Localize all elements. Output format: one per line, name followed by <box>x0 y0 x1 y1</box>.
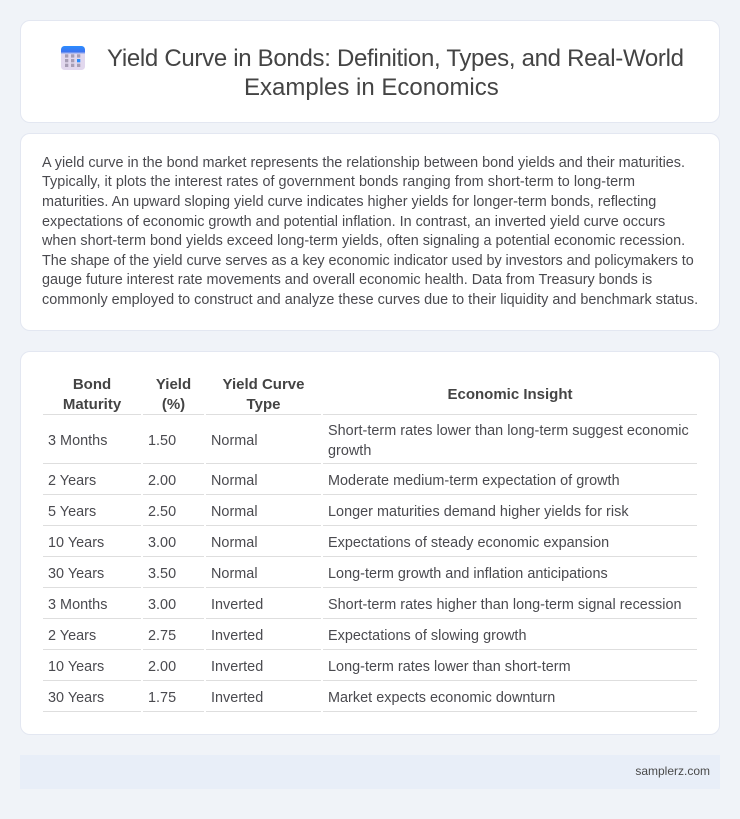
title text: Examples in Economics <box>244 74 499 101</box>
table: bond yields: Inverted <box>211 690 263 706</box>
panel: title <box>20 20 720 123</box>
table: bond yields: Short-term rates lower than long-term suggest economic <box>328 423 689 439</box>
table: bond yields: Long-term growth and inflation anticipations <box>328 566 608 582</box>
footer <box>20 755 720 789</box>
description text <box>42 155 698 308</box>
table: bond yields: 2 Years <box>48 628 96 644</box>
table: bond yields: Expectations of slowing growth <box>328 628 526 644</box>
table: bond yields: Inverted <box>211 597 263 613</box>
table: bond yields: 5 Years <box>48 504 96 520</box>
description text: Typically, it plots the interest rates of government bonds ranging from short-term to long-term <box>42 174 635 190</box>
table: bond yields: 3.00 <box>148 597 176 613</box>
table: bond yields <box>43 376 697 712</box>
table: bond yields: Normal <box>211 473 258 489</box>
icon: calendar <box>61 46 85 70</box>
table: bond yields: 10 Years <box>48 659 104 675</box>
table: bond yields: Moderate medium-term expectation of growth <box>328 473 620 489</box>
table: bond yields: Normal <box>211 535 258 551</box>
table: bond yields: 2 Years <box>48 473 96 489</box>
description text: The shape of the yield curve serves as a key economic indicator used by investors and policymakers to <box>42 253 694 269</box>
table: bond yields: 1.50 <box>148 433 176 449</box>
description text: gauge future interest rate movements and overall economic health. Data from Treasury bonds is <box>42 272 652 288</box>
table: bond yields: 10 Years <box>48 535 104 551</box>
table: bond yields: Economic Insight <box>447 386 572 403</box>
description text: when short-term bond yields exceed long-term yields, often signaling a potential economic recession. <box>42 233 685 249</box>
table: bond yields: 30 Years <box>48 566 104 582</box>
table: bond yields: Inverted <box>211 628 263 644</box>
panel: yield table <box>20 351 720 735</box>
description text: maturities. An upward sloping yield curve indicates higher yields for longer-term bonds, reflecting <box>42 194 656 210</box>
table: bond yields: Normal <box>211 433 258 449</box>
footer source text: samplerz.com <box>635 764 710 778</box>
title text: Yield Curve in Bonds: Definition, Types, and Real-World <box>107 45 684 72</box>
table: bond yields: 2.50 <box>148 504 176 520</box>
table: bond yields: 30 Years <box>48 690 104 706</box>
table: bond yields: Normal <box>211 566 258 582</box>
table: bond yields: Longer maturities demand higher yields for risk <box>328 504 629 520</box>
panel: description <box>20 133 720 331</box>
title text <box>107 45 684 101</box>
table: bond yields: Type <box>247 396 280 412</box>
table: bond yields: Maturity <box>63 396 121 412</box>
table: bond yields: Expectations of steady economic expansion <box>328 535 609 551</box>
table: bond yields: 2.75 <box>148 628 176 644</box>
description text: commonly employed to construct and analyze these curves due to their liquidity and benchmark status. <box>42 292 698 308</box>
table: bond yields: growth <box>328 442 371 458</box>
table: bond yields: 3 Months <box>48 433 107 449</box>
table: bond yields: 2.00 <box>148 473 176 489</box>
table: bond yields: Normal <box>211 504 258 520</box>
table: bond yields: Market expects economic downturn <box>328 690 555 706</box>
table: bond yields: 3.50 <box>148 566 176 582</box>
table: bond yields: Yield Curve <box>222 376 304 393</box>
table: bond yields: 3 Months <box>48 597 107 613</box>
table: bond yields: 3.00 <box>148 535 176 551</box>
table: bond yields: Short-term rates higher than long-term signal recession <box>328 597 682 613</box>
table: bond yields: Bond <box>73 376 111 393</box>
description text: A yield curve in the bond market represents the relationship between bond yields and their maturities. <box>42 155 685 171</box>
table: bond yields: Yield <box>156 376 191 393</box>
description text: expectations of economic growth and potential inflation. In contrast, an inverted yield curve occurs <box>42 214 665 230</box>
table: bond yields: Inverted <box>211 659 263 675</box>
table: bond yields: (%) <box>162 396 185 412</box>
table: bond yields: Long-term rates lower than short-term <box>328 659 571 675</box>
table: bond yields: 2.00 <box>148 659 176 675</box>
table: bond yields: 1.75 <box>148 690 176 706</box>
